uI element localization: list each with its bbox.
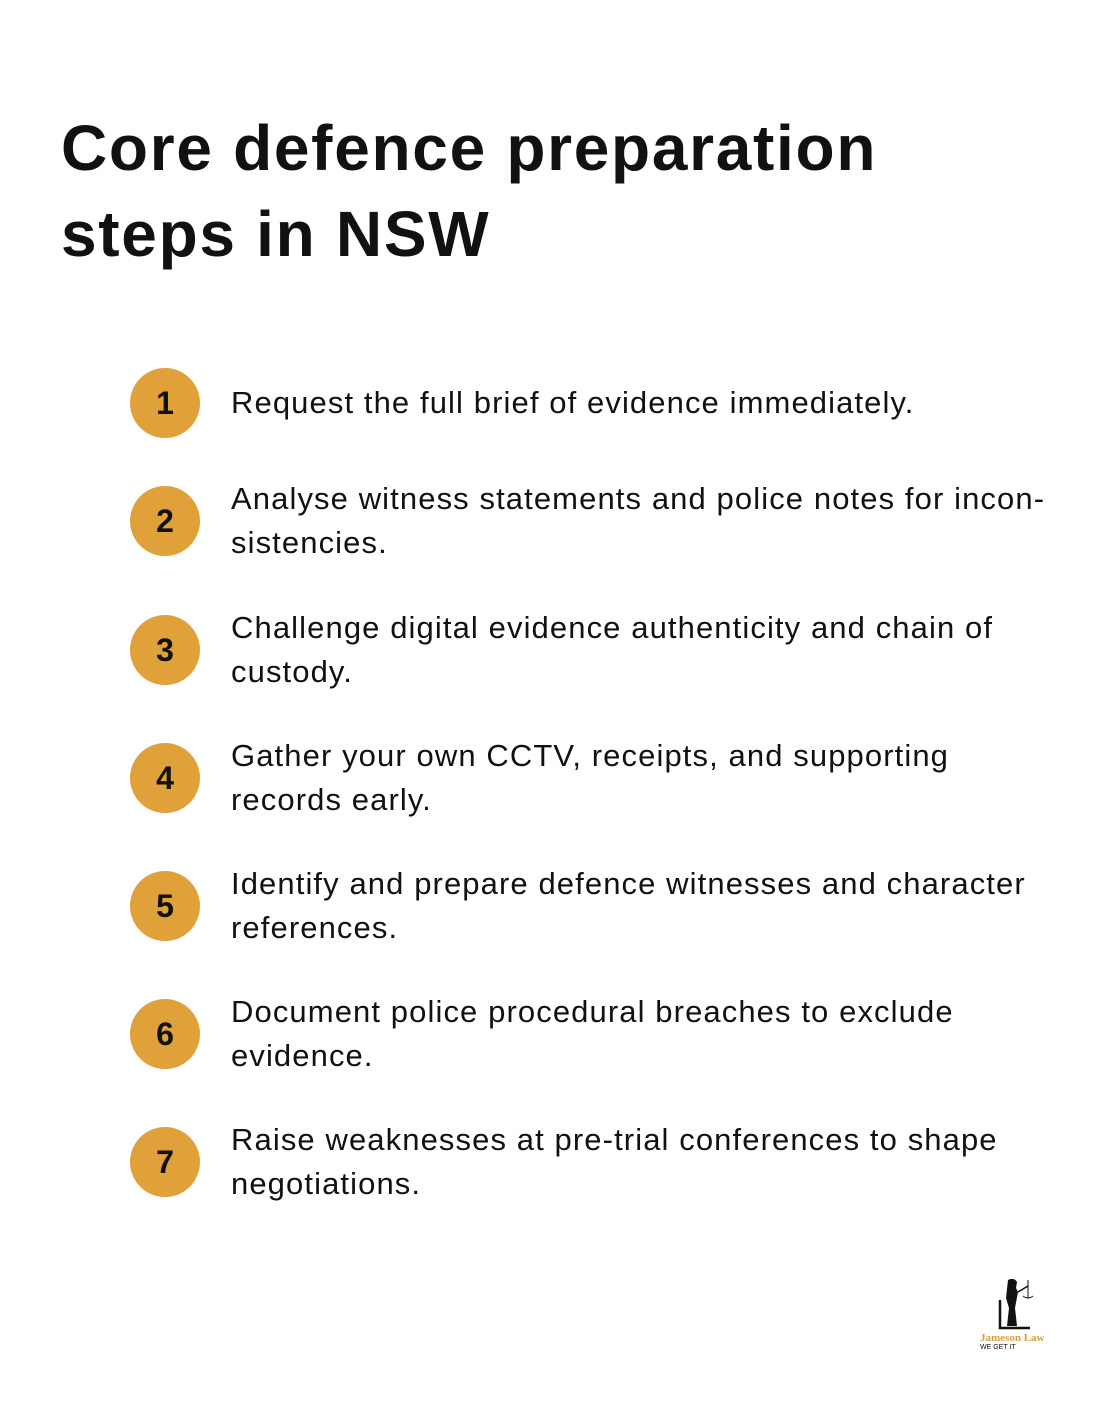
icon: justice figure (998, 1278, 1034, 1330)
step 1 (130, 368, 915, 438)
step 6: evidence. (231, 1038, 374, 1073)
step 2: 2 (156, 503, 174, 539)
step 6: Document police procedural breaches to exclude (231, 994, 954, 1029)
title: Core defence preparation (61, 112, 877, 184)
step 1: 1 (156, 385, 174, 421)
step 3 (130, 610, 993, 689)
title: steps in NSW (61, 198, 490, 270)
step 5: 5 (156, 888, 174, 924)
step 2: sistencies. (231, 525, 388, 560)
step 6: 6 (156, 1016, 174, 1052)
title (61, 112, 877, 270)
step 2: Analyse witness statements and police notes for incon- (231, 481, 1045, 516)
step 7: Raise weaknesses at pre-trial conferences to shape (231, 1122, 998, 1157)
step 5 (130, 866, 1026, 945)
step 4: records early. (231, 782, 432, 817)
step 5: references. (231, 910, 398, 945)
step 6 (130, 994, 954, 1073)
step 3: 3 (156, 632, 174, 668)
logo: WE GET IT (980, 1344, 1016, 1351)
step 1: Request the full brief of evidence immediately. (231, 385, 915, 420)
step 4: Gather your own CCTV, receipts, and supporting (231, 738, 949, 773)
step 4: 4 (156, 760, 174, 796)
step 2 (130, 481, 1045, 560)
step 3: custody. (231, 654, 353, 689)
step 7: negotiations. (231, 1166, 421, 1201)
step 7: 7 (156, 1144, 174, 1180)
step 3: Challenge digital evidence authenticity and chain of (231, 610, 993, 645)
step 4 (130, 738, 949, 817)
logo (980, 1278, 1044, 1351)
step 5: Identify and prepare defence witnesses and character (231, 866, 1026, 901)
step 7 (130, 1122, 998, 1201)
logo text: Jameson Law (980, 1332, 1044, 1344)
